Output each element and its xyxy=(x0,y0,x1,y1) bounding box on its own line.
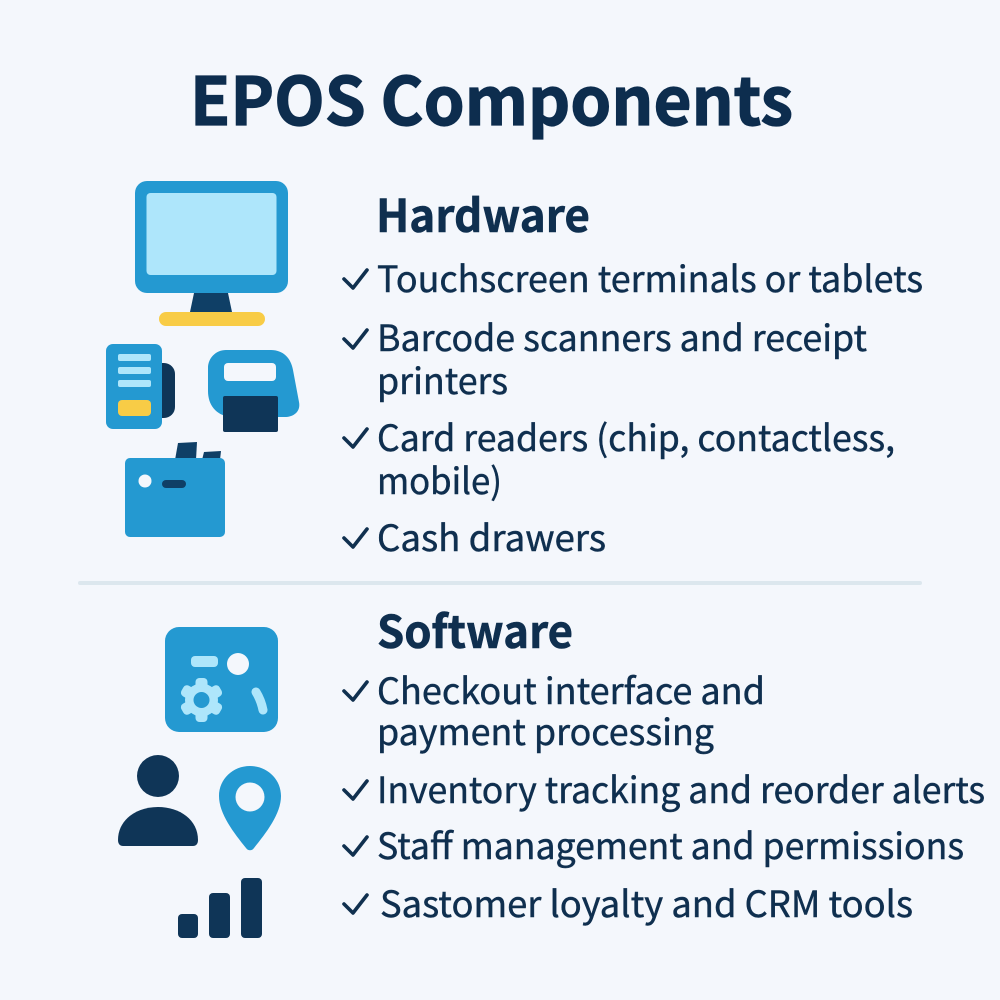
item: touchscreen: Touchscreen terminals or tablets xyxy=(377,251,923,303)
icon: bar chart xyxy=(178,878,262,938)
item: card readers: mobile) xyxy=(377,453,502,505)
gear xyxy=(179,678,224,722)
item: checkout: payment processing xyxy=(377,704,714,756)
icon: monitor xyxy=(135,181,288,326)
item: barcode scanners: printers xyxy=(377,353,508,405)
item: barcode scanners xyxy=(344,310,867,405)
icon: card reader xyxy=(106,344,175,429)
item: customer loyalty: Sastomer loyalty and CRM tools xyxy=(380,876,913,928)
icon: software panel xyxy=(165,627,278,732)
icon: location pin xyxy=(219,766,281,850)
item: barcode scanners: Barcode scanners and receipt xyxy=(377,310,867,362)
item: cash drawers: Cash drawers xyxy=(377,510,606,562)
heading: software: Software xyxy=(377,596,573,661)
heading: hardware: Hardware xyxy=(376,180,590,245)
item: staff: Staff management and permissions xyxy=(377,818,964,870)
list: software items xyxy=(344,663,985,928)
icon: receipt printer xyxy=(208,350,299,432)
item: card readers xyxy=(344,410,895,505)
item: checkout xyxy=(344,663,765,756)
item: inventory: Inventory tracking and reorder alerts xyxy=(377,762,985,814)
icon: person xyxy=(118,755,198,846)
title: EPOS Components xyxy=(190,49,793,145)
icon: cash drawer xyxy=(125,442,225,537)
list: hardware items xyxy=(344,251,923,562)
item: card readers: Card readers (chip, contactless, xyxy=(377,410,895,462)
item: checkout: Checkout interface and xyxy=(377,663,765,715)
